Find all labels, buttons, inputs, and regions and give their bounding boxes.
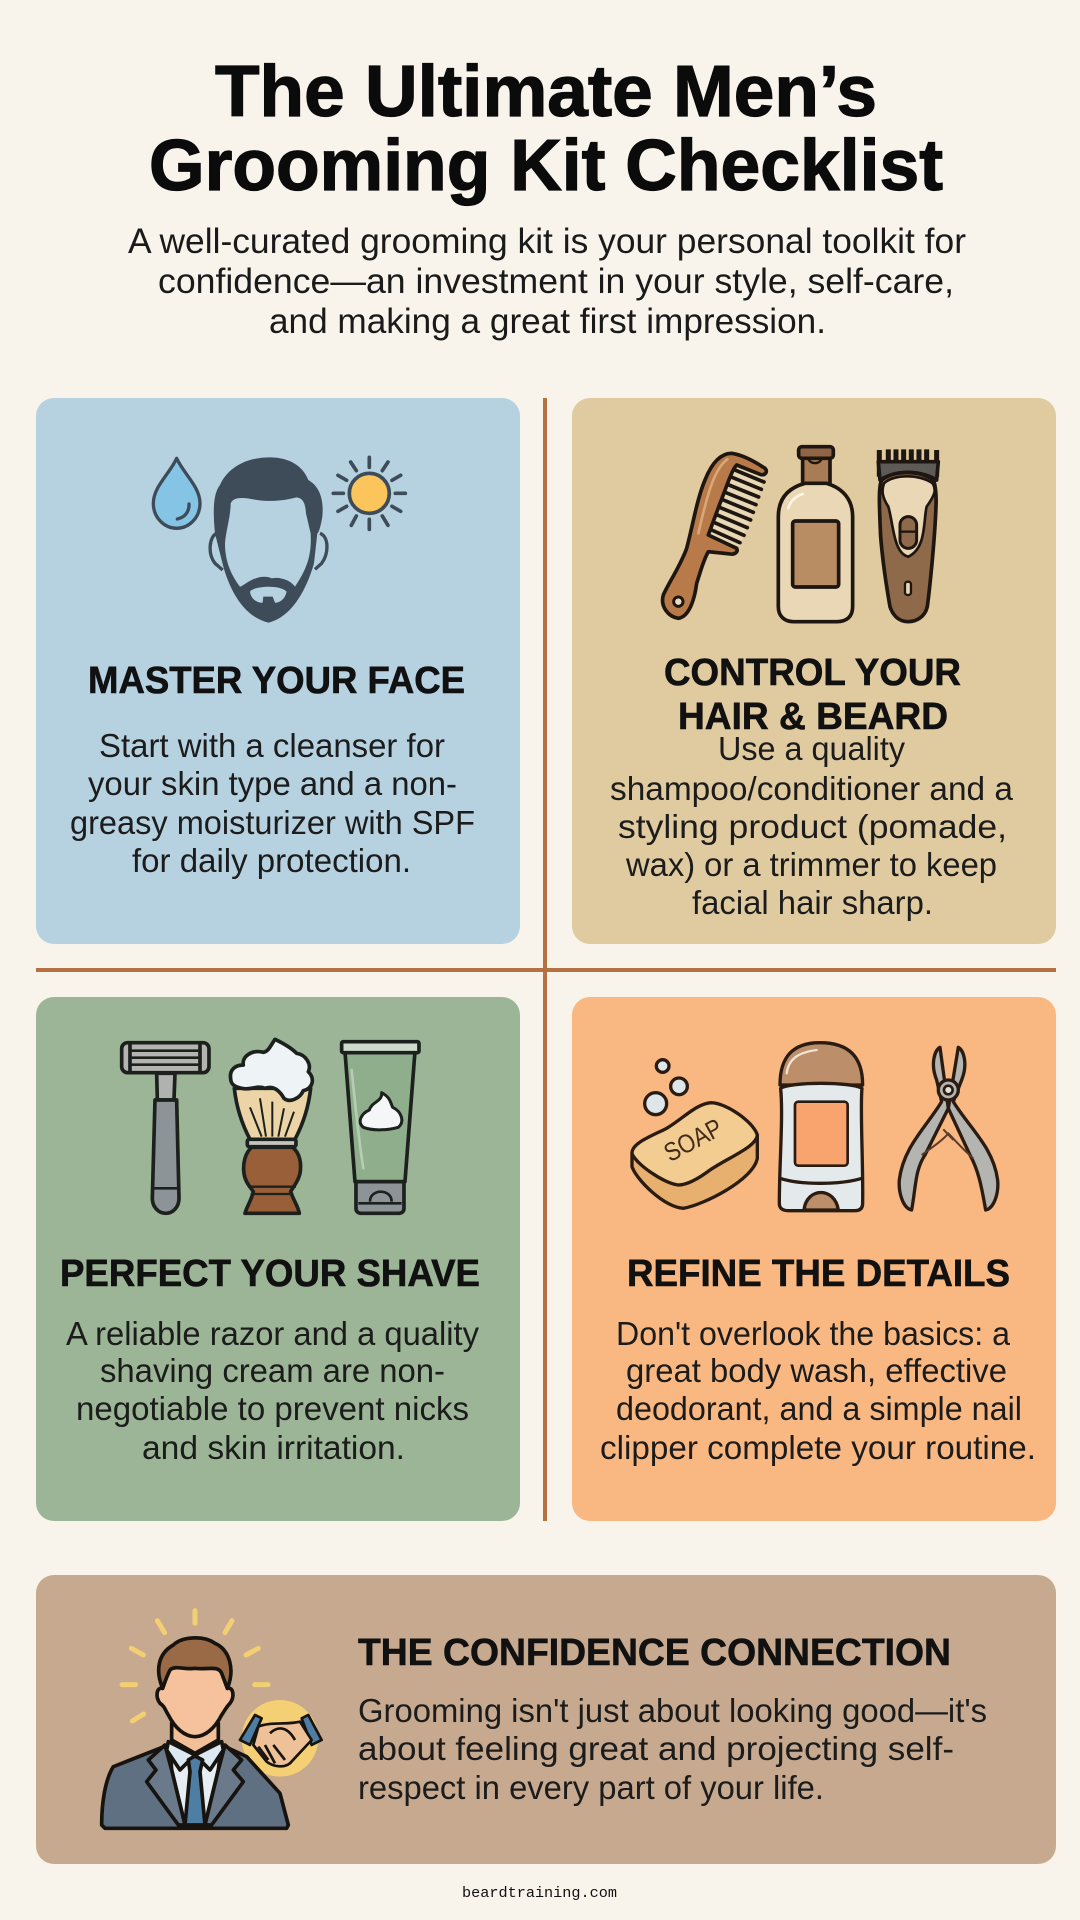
title: Grooming Kit Checklist bbox=[149, 126, 943, 206]
body text: and skin irritation. bbox=[142, 1429, 405, 1466]
body text: Start with a cleanser for bbox=[99, 727, 445, 764]
intro text: A well-curated grooming kit is your personal toolkit for bbox=[128, 222, 966, 261]
panel: perfect your shave bbox=[36, 997, 520, 1521]
body text: deodorant, and a simple nail bbox=[616, 1390, 1022, 1427]
horizontal divider bbox=[36, 968, 1056, 972]
intro text: and making a great first impression. bbox=[269, 302, 826, 341]
body text: about feeling great and projecting self- bbox=[358, 1730, 954, 1767]
body text: shampoo/conditioner and a bbox=[610, 770, 1014, 807]
icon: soap, deodorant and nail clipper: SOAP bbox=[659, 1112, 727, 1168]
body text: Use a quality bbox=[718, 730, 905, 767]
icon: razor, brush and tube bbox=[122, 1039, 419, 1213]
heading: PERFECT YOUR SHAVE bbox=[60, 1253, 480, 1295]
body text: facial hair sharp. bbox=[692, 884, 933, 921]
body text: A reliable razor and a quality bbox=[66, 1315, 479, 1352]
heading: THE CONFIDENCE CONNECTION bbox=[358, 1632, 951, 1674]
body text: shaving cream are non- bbox=[100, 1352, 445, 1389]
icon: confident businessman with handshake bbox=[102, 1611, 322, 1828]
body text: respect in every part of your life. bbox=[358, 1769, 824, 1806]
panel: refine the details bbox=[572, 997, 1056, 1521]
panel: control your hair and beard bbox=[572, 398, 1056, 944]
icon: drop, face and sun bbox=[153, 457, 405, 623]
body text: Don't overlook the basics: a bbox=[616, 1315, 1011, 1352]
panel: master your face bbox=[36, 398, 520, 944]
heading bbox=[664, 652, 961, 738]
vertical divider bbox=[543, 398, 547, 1521]
title bbox=[149, 52, 943, 206]
body text: negotiable to prevent nicks bbox=[76, 1390, 469, 1427]
body text: great body wash, effective bbox=[626, 1352, 1007, 1389]
heading: REFINE THE DETAILS bbox=[627, 1253, 1010, 1295]
heading: HAIR & BEARD bbox=[678, 696, 948, 738]
footer: beardtraining.com bbox=[462, 1885, 617, 1902]
body text: Grooming isn't just about looking good—it's bbox=[358, 1692, 987, 1729]
heading: MASTER YOUR FACE bbox=[88, 660, 465, 702]
body text: styling product (pomade, bbox=[618, 808, 1007, 845]
body text bbox=[358, 1692, 987, 1806]
panel: the confidence connection bbox=[36, 1575, 1056, 1864]
intro text: confidence—an investment in your style, self-care, bbox=[158, 262, 954, 301]
body text: greasy moisturizer with SPF bbox=[70, 804, 475, 841]
body text: for daily protection. bbox=[132, 842, 411, 879]
body text: wax) or a trimmer to keep bbox=[625, 846, 997, 883]
body text bbox=[610, 730, 1014, 921]
body text bbox=[70, 727, 475, 879]
icon: comb, bottle and trimmer bbox=[663, 447, 938, 622]
title: The Ultimate Men’s bbox=[215, 52, 877, 132]
body text bbox=[66, 1315, 479, 1466]
icon: soap, deodorant and nail clipper bbox=[632, 1043, 998, 1211]
body text: your skin type and a non- bbox=[88, 765, 457, 802]
body text bbox=[600, 1315, 1036, 1466]
heading: CONTROL YOUR bbox=[664, 652, 961, 694]
intro text bbox=[128, 222, 966, 341]
body text: clipper complete your routine. bbox=[600, 1429, 1036, 1466]
